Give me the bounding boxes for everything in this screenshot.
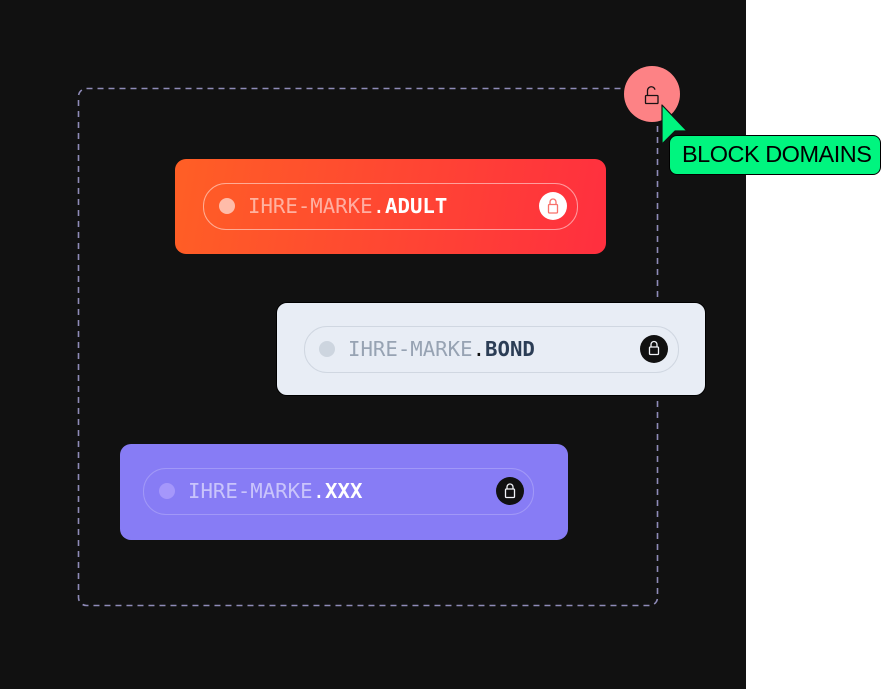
panel: .BOND domain card [276, 302, 706, 396]
icon: closed lock on black [640, 335, 668, 363]
icon: closed lock on black [496, 477, 524, 505]
icon: open lock button [624, 66, 680, 122]
domain text: IHRE-MARKE.XXX [188, 479, 362, 503]
status dot [319, 341, 335, 357]
status dot [159, 483, 175, 499]
domain text: IHRE-MARKE.ADULT [248, 194, 447, 218]
status dot [219, 198, 235, 214]
callout: BLOCK DOMAINS label [669, 135, 881, 175]
arrow: green cursor [661, 104, 686, 142]
panel: .XXX domain card [120, 444, 568, 540]
address pill [304, 326, 679, 373]
address pill [143, 468, 534, 515]
address pill [203, 183, 578, 230]
callout: BLOCK DOMAINS label: BLOCK DOMAINS [682, 141, 871, 167]
icon: closed lock on white [539, 192, 567, 220]
domain text: IHRE-MARKE.BOND [348, 337, 535, 361]
dashed selection frame [78, 88, 658, 606]
panel: .ADULT domain card [175, 159, 606, 254]
